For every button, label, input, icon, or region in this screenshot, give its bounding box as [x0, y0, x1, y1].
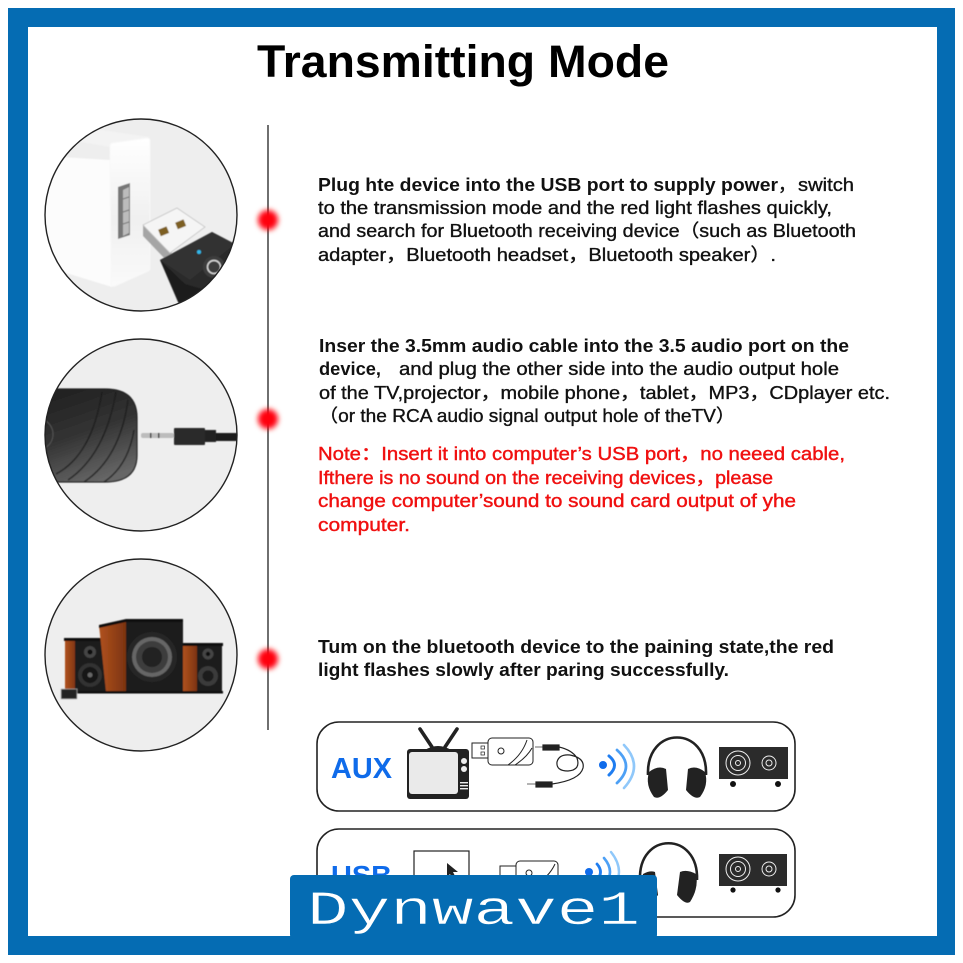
right speaker: [183, 643, 223, 693]
note text in red: [318, 444, 845, 535]
panel: USB connection diagram: [317, 829, 795, 917]
panel: USB plug photo circle: [44, 118, 238, 312]
text block: step 1: ，: [778, 175, 796, 195]
note text in red: Ifthere is no sound on the receiving devices，please: [318, 468, 773, 488]
icon: TV: [407, 729, 469, 799]
icon: USB dongle: [500, 861, 558, 887]
panel: speakers photo circle: [45, 559, 237, 751]
text block: step 2: （or the RCA audio signal output hole of theTV）: [319, 406, 735, 426]
left speaker: [64, 638, 106, 693]
USB label: USB: [331, 860, 392, 891]
panel: audio jack photo circle: [30, 339, 240, 531]
text block: step 1: switch: [798, 175, 854, 195]
text block: step 1: [318, 175, 856, 265]
icon: computer screen: [414, 851, 469, 901]
icon: audio cable: [527, 745, 583, 787]
text block: step 3: [318, 637, 834, 680]
note text in red: computer.: [318, 515, 410, 535]
icon: wireless signal: [585, 852, 619, 892]
text block: step 3: Tum on the bluetooth device to the paining state,the red: [318, 637, 834, 657]
timeline dot 2: [258, 409, 278, 429]
icon: sound box: [719, 747, 788, 787]
text block: step 1: adapter，Bluetooth headset，Bluetooth speaker）.: [318, 245, 776, 265]
watermark banner: [290, 875, 657, 939]
icon: USB dongle: [472, 738, 533, 765]
timeline line: [267, 125, 269, 730]
icon: headphones: [648, 738, 706, 798]
icon: sound box: [719, 854, 787, 893]
text block: step 1: and search for Bluetooth receiving device（such as Bluetooth: [318, 221, 856, 241]
text block: step 2: [319, 336, 890, 426]
panel: AUX connection diagram: [317, 722, 795, 811]
center subwoofer: [99, 619, 183, 692]
icon: headphones: [640, 843, 697, 903]
text block: step 2: Inser the 3.5mm audio cable into the 3.5 audio port on the: [319, 336, 849, 356]
timeline dot 1: [258, 210, 278, 230]
text block: step 2: of the TV,projector，mobile phone，tablet，MP3，CDplayer etc.: [319, 383, 890, 403]
watermark banner: Dynwave1: [307, 885, 640, 939]
text block: step 2: and plug the other side into the audio output hole: [399, 359, 839, 379]
text block: step 3: light flashes slowly after paring successfully.: [318, 660, 729, 680]
AUX label: AUX: [331, 753, 393, 785]
note text in red: change computer’sound to sound card output of yhe: [318, 491, 796, 511]
text block: step 2: device,: [319, 359, 381, 379]
icon: wireless signal: [599, 745, 634, 788]
text block: step 1: to the transmission mode and the red light flashes quickly,: [318, 198, 832, 218]
text block: step 1: Plug hte device into the USB port to supply power: [318, 175, 778, 195]
note text in red: Note：Insert it into computer’s USB port，no neeed cable,: [318, 444, 845, 464]
title: Transmitting Mode: [257, 36, 669, 87]
timeline dot 3: [258, 649, 278, 669]
